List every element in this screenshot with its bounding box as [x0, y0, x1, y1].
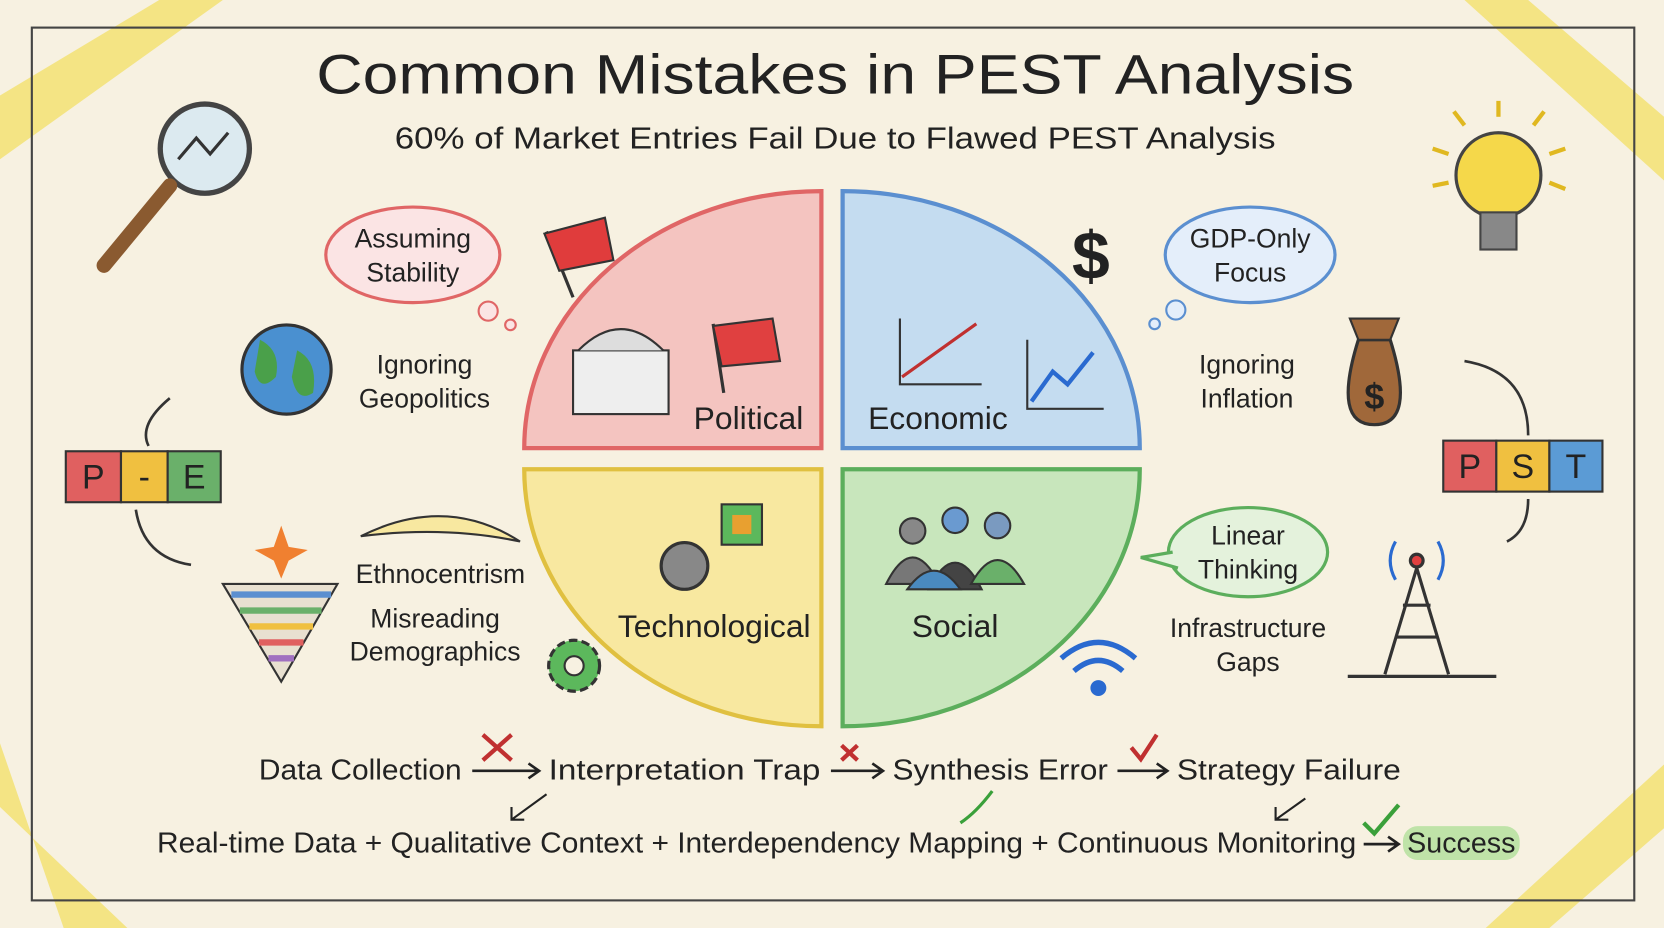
- text: ethnocentrism: Misreading: [370, 604, 500, 634]
- icon: wifi: [1061, 642, 1136, 693]
- puzzle: P-E: P: [82, 458, 105, 496]
- text: ignoring geopolitics: Geopolitics: [359, 384, 490, 414]
- puzzle: PST: T: [1566, 448, 1586, 486]
- callout: gdp-only: [1149, 207, 1335, 329]
- process flow row 1: Strategy Failure: [1177, 754, 1401, 786]
- icon: money bag: $: [1364, 376, 1384, 417]
- arrows: curved: [136, 361, 1528, 565]
- panel: social: [843, 469, 1140, 726]
- icon: money bag: [1348, 319, 1400, 425]
- callout: gdp-only: GDP-Only: [1190, 223, 1311, 253]
- process flow row 1: [259, 735, 1401, 786]
- text: ethnocentrism: Ethnocentrism: [356, 559, 525, 589]
- text: infrastructure gaps: Gaps: [1216, 647, 1280, 677]
- callout: ethnocentrism swoosh: [361, 516, 520, 542]
- callout: assuming stability: Assuming: [355, 223, 471, 253]
- text: infrastructure gaps: Infrastructure: [1170, 613, 1326, 643]
- puzzle: P-E: -: [139, 458, 150, 496]
- callout: assuming stability: [326, 207, 516, 330]
- callout: linear thinking: Linear: [1211, 521, 1285, 551]
- icon: dollar: $: [1072, 219, 1110, 294]
- callout: assuming stability: Stability: [366, 257, 460, 287]
- panel: economic: Economic: [868, 400, 1008, 436]
- process flow row 1: Synthesis Error: [892, 754, 1108, 786]
- title: Common Mistakes in PEST Analysis: [316, 43, 1354, 105]
- icon: pyramid: [223, 526, 337, 682]
- text: ethnocentrism: [350, 559, 525, 666]
- puzzle: P-E: E: [183, 458, 206, 496]
- process flow row 2: Success: [1407, 828, 1515, 860]
- panel: economic: [843, 191, 1140, 448]
- panel: political: [524, 191, 821, 448]
- callout: linear thinking: [1141, 508, 1328, 597]
- text: infrastructure gaps: [1170, 613, 1326, 677]
- text: ignoring geopolitics: [359, 350, 490, 414]
- subtitle: 60% of Market Entries Fail Due to Flawed PEST Analysis: [395, 121, 1276, 156]
- panel: social: Social: [912, 608, 998, 644]
- text: ignoring inflation: [1199, 350, 1295, 414]
- icon: flag: [544, 218, 613, 297]
- process flow row 1: Interpretation Trap: [549, 754, 820, 786]
- icon: tower: [1348, 542, 1496, 676]
- puzzle: PST: P: [1458, 448, 1481, 486]
- process flow row 2: [157, 791, 1520, 860]
- callout: linear thinking: Thinking: [1198, 555, 1298, 585]
- process flow row 1: Data Collection: [259, 754, 462, 786]
- callout: gdp-only: Focus: [1214, 257, 1286, 287]
- puzzle: P-E: [66, 451, 221, 502]
- process flow row 2: Real-time Data + Qualitative Context + Interdependency Mapping + Continuous Monitoring: [157, 828, 1356, 860]
- text: ignoring inflation: Ignoring: [1199, 350, 1295, 380]
- panel: political: Political: [694, 400, 803, 436]
- panel: technological: Technological: [618, 608, 811, 644]
- text: ignoring geopolitics: Ignoring: [377, 350, 472, 380]
- quadrant chart: [524, 191, 1140, 726]
- text: ethnocentrism: Demographics: [350, 636, 521, 666]
- text: ignoring inflation: Inflation: [1201, 384, 1293, 414]
- puzzle: PST: [1443, 441, 1602, 492]
- icon: light bulb: [1433, 101, 1565, 250]
- icon: globe: [242, 325, 331, 414]
- icon: magnifier: [104, 104, 249, 265]
- panel: technological: [524, 469, 821, 726]
- puzzle: PST: S: [1512, 448, 1534, 486]
- icon: green gear: [549, 640, 600, 691]
